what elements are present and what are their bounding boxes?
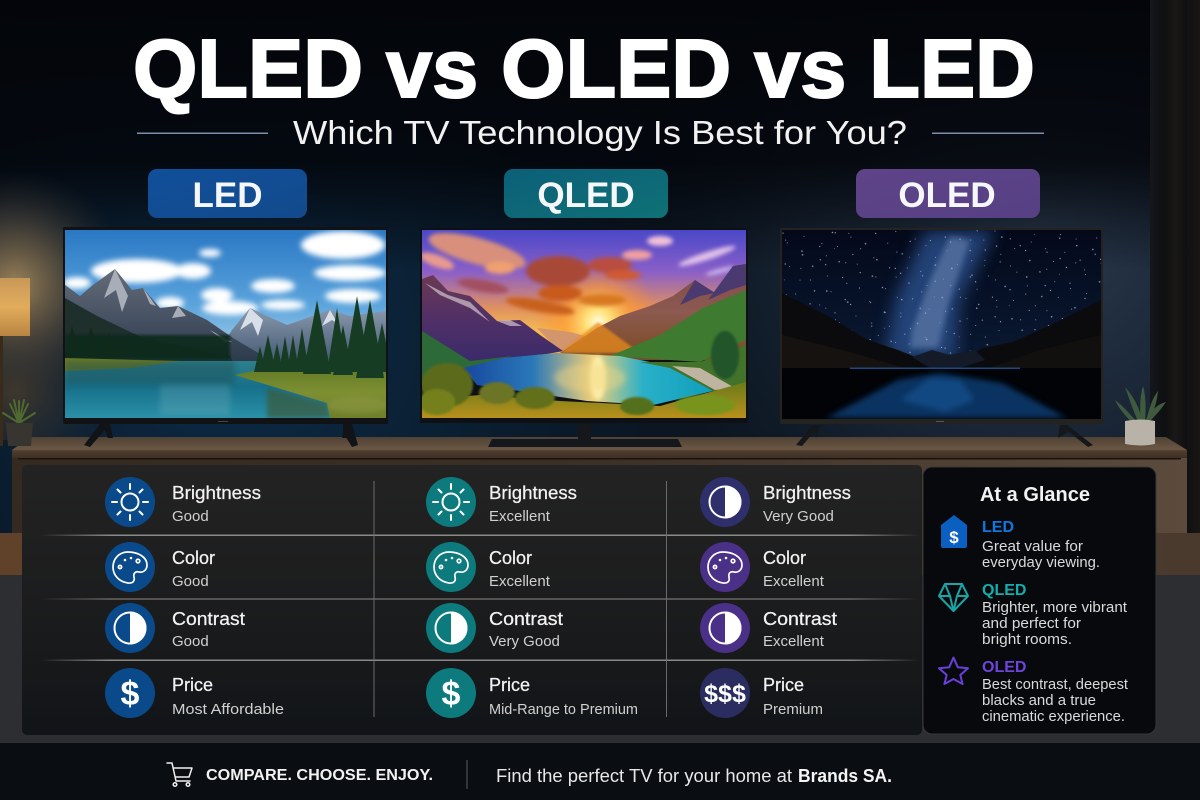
LED color: Good bbox=[172, 573, 209, 590]
tv: OLED bbox=[780, 228, 1103, 447]
title: QLED vs OLED vs LED bbox=[133, 22, 1035, 115]
plant right bbox=[1115, 386, 1166, 446]
glance: OLED: Best contrast, deepest bbox=[982, 677, 1128, 693]
LED brightness bbox=[105, 477, 261, 527]
LED price: Price bbox=[172, 675, 213, 695]
tv stand legs bbox=[84, 424, 358, 447]
glance: LED: Great value for bbox=[982, 539, 1083, 555]
screen: mountain lake bbox=[63, 230, 392, 418]
glance: OLED: blacks and a true bbox=[982, 693, 1096, 709]
OLED price: Premium bbox=[763, 701, 823, 718]
QLED price: Mid-Range to Premium bbox=[489, 701, 638, 718]
LED brightness: Good bbox=[172, 508, 209, 525]
QLED color bbox=[426, 542, 551, 592]
QLED color: Color bbox=[489, 548, 532, 568]
cabinet bbox=[12, 437, 1187, 533]
glance: OLED: cinematic experience. bbox=[982, 709, 1125, 725]
LED brightness: Brightness bbox=[172, 483, 261, 503]
QLED contrast: Very Good bbox=[489, 633, 560, 650]
OLED price bbox=[700, 668, 823, 718]
OLED color: Color bbox=[763, 548, 806, 568]
LED contrast bbox=[105, 603, 245, 653]
icon: shopping cart bbox=[167, 763, 192, 786]
badge: QLED: QLED bbox=[537, 176, 635, 215]
OLED brightness: Very Good bbox=[763, 508, 834, 525]
icon: price tag: $ bbox=[949, 528, 959, 547]
OLED contrast: Excellent bbox=[763, 633, 825, 650]
QLED price: $ bbox=[442, 675, 461, 713]
OLED brightness: Brightness bbox=[763, 483, 851, 503]
OLED price: $$$ bbox=[704, 680, 746, 708]
LED contrast: Contrast bbox=[172, 609, 245, 629]
LED contrast: Good bbox=[172, 633, 209, 650]
QLED contrast bbox=[426, 603, 563, 653]
column and row dividers bbox=[40, 481, 920, 717]
icon: star bbox=[939, 658, 968, 684]
glance: LED: LED bbox=[982, 519, 1014, 536]
LED price: $ bbox=[121, 675, 140, 713]
OLED price: Price bbox=[763, 675, 804, 695]
QLED contrast: Contrast bbox=[489, 609, 563, 629]
tv stand legs bbox=[796, 425, 1093, 447]
call to action: Find the perfect TV for your home at bbox=[496, 766, 792, 786]
QLED brightness bbox=[426, 477, 577, 527]
plant left bbox=[3, 400, 35, 446]
glance: OLED bbox=[939, 658, 1128, 725]
footer bar bbox=[0, 743, 1200, 800]
LED column bbox=[105, 477, 284, 718]
OLED color bbox=[700, 542, 825, 592]
curtain bbox=[1150, 0, 1200, 540]
QLED column bbox=[426, 477, 638, 718]
tv logo strip bbox=[936, 421, 944, 422]
glance: QLED: and perfect for bbox=[982, 616, 1081, 632]
lamp bbox=[0, 278, 30, 446]
QLED price bbox=[426, 668, 638, 718]
LED price: Most Affordable bbox=[172, 701, 284, 718]
OLED color: Excellent bbox=[763, 573, 825, 590]
LED color: Color bbox=[172, 548, 215, 568]
subtitle with rules: Which TV Technology Is Best for You? bbox=[293, 114, 907, 151]
panel: at a glance bbox=[923, 467, 1156, 734]
glance: OLED: OLED bbox=[982, 659, 1026, 676]
badge: LED: LED bbox=[192, 176, 262, 215]
OLED contrast: Contrast bbox=[763, 609, 837, 629]
glance heading: At a Glance bbox=[980, 484, 1090, 506]
glance: QLED bbox=[939, 582, 1127, 648]
badge: OLED: OLED bbox=[898, 176, 996, 215]
OLED brightness bbox=[700, 477, 851, 527]
QLED color: Excellent bbox=[489, 573, 551, 590]
comparison panel bbox=[22, 465, 922, 735]
glance: QLED: bright rooms. bbox=[982, 632, 1072, 648]
icon: diamond bbox=[939, 584, 968, 611]
OLED column bbox=[700, 477, 851, 718]
pedestal stand bbox=[488, 423, 682, 447]
badge: LED bbox=[148, 169, 307, 218]
LED color bbox=[105, 542, 215, 592]
QLED brightness: Brightness bbox=[489, 483, 577, 503]
glance: QLED: Brighter, more vibrant bbox=[982, 600, 1127, 616]
badge: OLED bbox=[856, 169, 1040, 218]
tv logo strip bbox=[218, 421, 228, 422]
glance: LED bbox=[941, 515, 1100, 571]
floor and rug bbox=[0, 533, 1200, 745]
slogan: COMPARE. CHOOSE. ENJOY. bbox=[206, 767, 433, 784]
brand name: Brands SA. bbox=[798, 766, 892, 786]
screen: night sky bbox=[782, 230, 1101, 419]
LED price bbox=[105, 668, 284, 718]
tv: LED bbox=[63, 227, 392, 447]
OLED contrast bbox=[700, 603, 837, 653]
QLED brightness: Excellent bbox=[489, 508, 551, 525]
tv: QLED bbox=[418, 226, 748, 447]
icon: price tag bbox=[941, 515, 967, 548]
screen: sunset lake bbox=[418, 226, 746, 418]
badge: QLED bbox=[504, 169, 668, 218]
QLED price: Price bbox=[489, 675, 530, 695]
glance: LED: everyday viewing. bbox=[982, 555, 1100, 571]
glance: QLED: QLED bbox=[982, 582, 1026, 599]
